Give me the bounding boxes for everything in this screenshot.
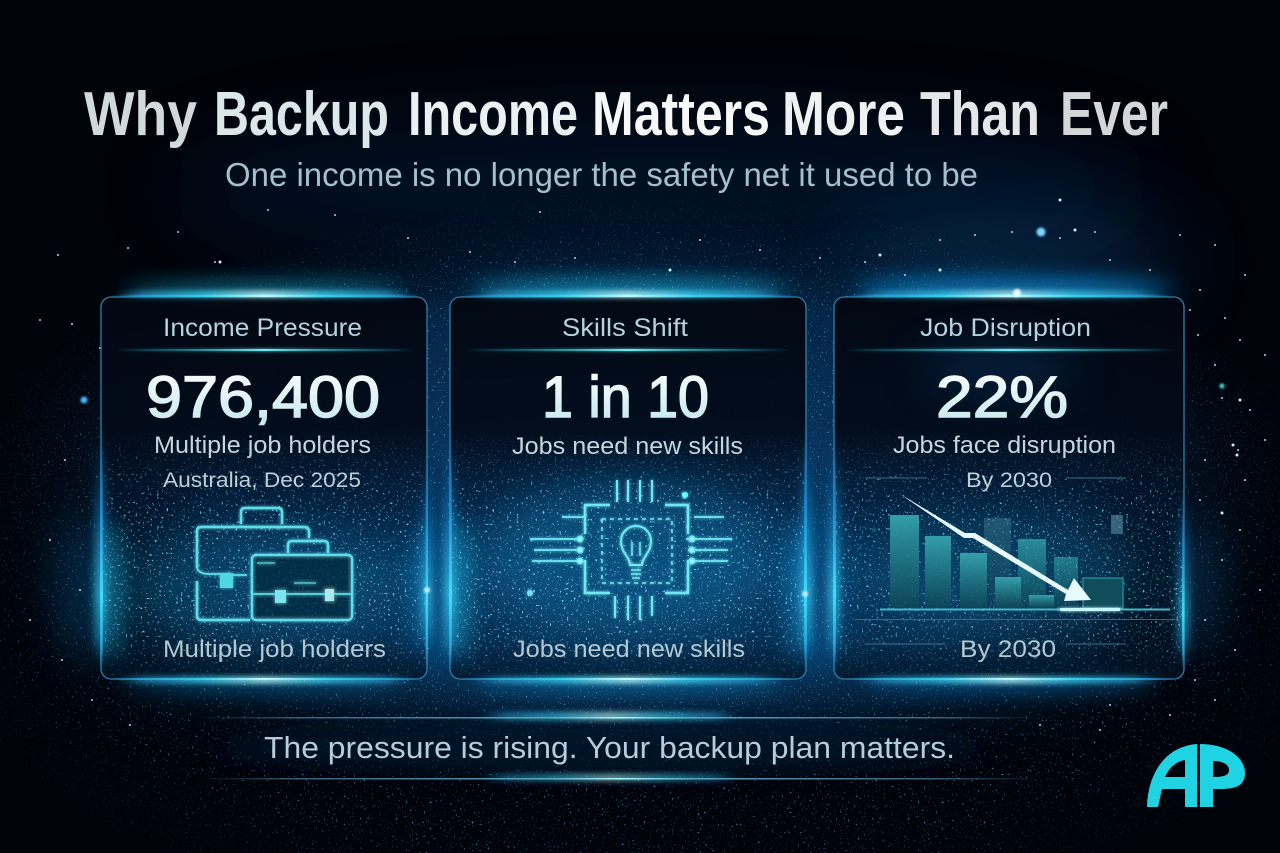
panel: income pressure [97, 291, 430, 683]
bottom caption: Jobs need new skills [513, 636, 745, 663]
panel: skills shift [446, 291, 810, 683]
footer message: The pressure is rising. Your backup plan matters. [264, 730, 955, 765]
arrow [900, 494, 1091, 601]
title: Than [920, 80, 1040, 149]
heading: Income Pressure [163, 314, 362, 342]
scattered stars [30, 210, 1265, 730]
heading: Job Disruption [920, 314, 1091, 342]
title: Why [84, 80, 197, 149]
title: More [782, 80, 905, 149]
chart: declining bars with arrow [855, 494, 1175, 620]
header divider [115, 349, 415, 351]
stat note: Australia, Dec 2025 [163, 469, 361, 492]
stat note: By 2030 [966, 469, 1052, 492]
big number: 976,400 [146, 365, 380, 430]
title: Income [408, 80, 578, 149]
stat label: Jobs need new skills [512, 433, 743, 460]
bottom caption: Multiple job holders [163, 636, 386, 663]
header divider [845, 349, 1175, 351]
subtitle: One income is no longer the safety net it used to be [225, 156, 978, 193]
big number: 22% [936, 365, 1068, 430]
header divider [465, 349, 791, 351]
title: Matters [592, 80, 770, 149]
glow above card tops [54, 278, 1218, 690]
heading: Skills Shift [562, 314, 688, 342]
title [84, 80, 1168, 149]
title: Ever [1060, 80, 1168, 149]
logo: AP [1147, 744, 1245, 807]
icon: briefcases [197, 508, 352, 620]
bottom rules [865, 643, 1126, 645]
bottom caption: By 2030 [960, 636, 1056, 663]
footer message band [200, 712, 1040, 781]
title: Backup [214, 80, 389, 149]
stat label: Multiple job holders [154, 432, 371, 459]
panel: job disruption [830, 289, 1187, 683]
big number: 1 in 10 [542, 365, 709, 430]
note rules [865, 477, 1126, 479]
icon: chip with lightbulb [527, 480, 732, 620]
stat label: Jobs face disruption [893, 432, 1116, 459]
